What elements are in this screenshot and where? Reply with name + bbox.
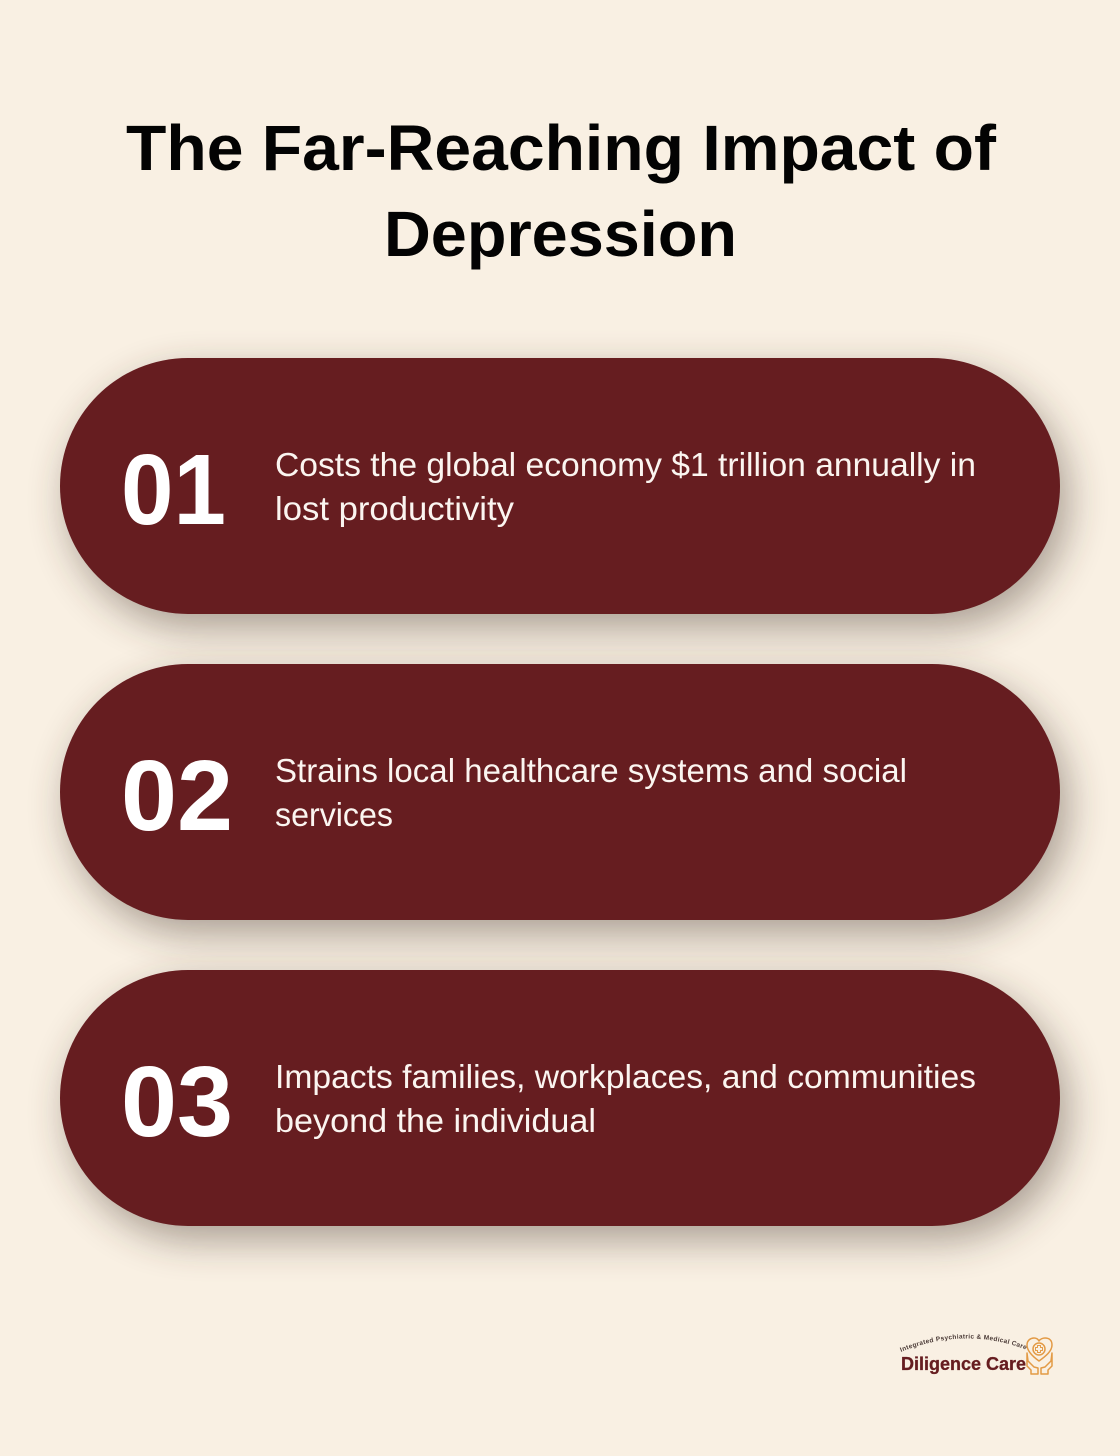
panel: card 02	[60, 664, 1068, 934]
panel: card 01	[60, 358, 1068, 628]
text: card 03	[275, 1058, 976, 1139]
text: card 03: beyond the individual	[275, 1102, 596, 1139]
text: card 02	[275, 752, 907, 833]
text: card 01: lost productivity	[275, 490, 515, 527]
title: Depression	[384, 198, 737, 270]
text: card 01: Costs the global economy $1 trillion annually in	[275, 446, 976, 483]
title	[126, 112, 997, 270]
number 03: 03	[121, 1046, 233, 1158]
text: card 02: services	[275, 796, 393, 833]
text: card 03: Impacts families, workplaces, and communities	[275, 1058, 976, 1095]
logo: Diligence Care	[900, 1334, 1053, 1375]
panel: card 03	[60, 970, 1068, 1240]
logo tagline: Integrated Psychiatric & Medical Care	[900, 1334, 1026, 1352]
text: card 01	[275, 446, 976, 527]
title: The Far-Reaching Impact of	[126, 112, 997, 184]
text: card 02: Strains local healthcare systems and social	[275, 752, 907, 789]
number 01: 01	[121, 434, 226, 546]
logo wordmark: Diligence Care	[901, 1354, 1026, 1374]
icon: heart in caring hands	[1027, 1338, 1052, 1374]
number 02: 02	[121, 740, 233, 852]
